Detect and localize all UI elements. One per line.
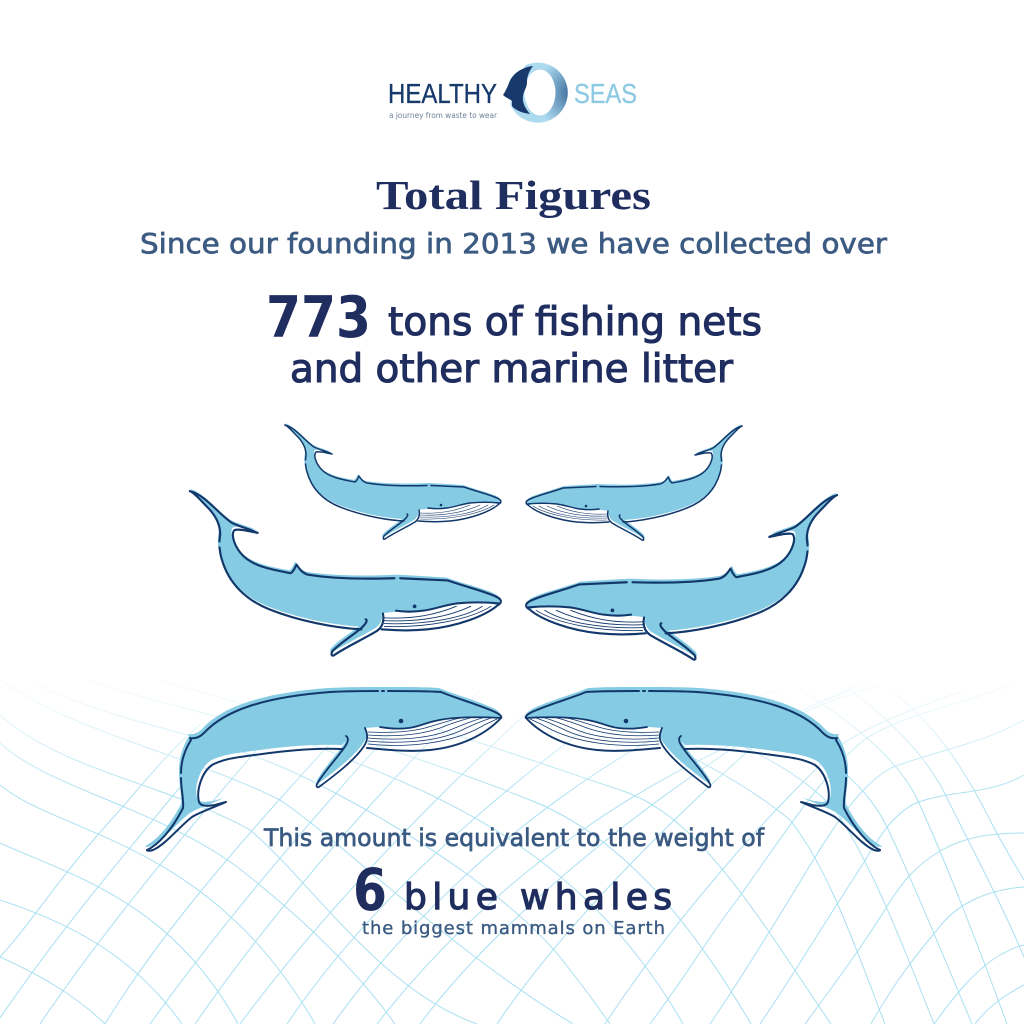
text: and other marine litter: and other marine litter: [290, 347, 734, 392]
logo tagline: a journey from waste to wear: [389, 111, 498, 120]
whale: middle right: [526, 492, 838, 660]
equivalence statement: This amount is equivalent to the weight of: [263, 824, 765, 852]
text: blue whales: blue whales: [404, 877, 672, 918]
logo icon: ring and dolphin: [503, 63, 568, 123]
logo: Healthy Seas: [388, 63, 637, 123]
title: Total Figures: [376, 172, 651, 218]
text: tons of fishing nets: tons of fishing nets: [388, 300, 762, 345]
subtitle: Since our founding in 2013 we have collected over: [140, 227, 887, 260]
logo wordmark: HEALTHY: HEALTHY: [388, 78, 497, 109]
whale: bottom left: [145, 687, 501, 851]
whale count headline: [353, 856, 672, 924]
whales illustration: [145, 423, 882, 851]
whale: top left: [284, 423, 501, 539]
whale: bottom right: [526, 687, 882, 851]
headline figure: 773 tons: [266, 285, 762, 392]
caption: the biggest mammals on Earth: [362, 918, 665, 939]
logo wordmark: SEAS: SEAS: [574, 78, 637, 109]
fishing net background: [0, 680, 1024, 1024]
whale: top right: [526, 424, 743, 540]
whale: middle left: [189, 488, 501, 656]
number 773: 773: [266, 285, 371, 351]
number 6: 6: [353, 856, 387, 924]
